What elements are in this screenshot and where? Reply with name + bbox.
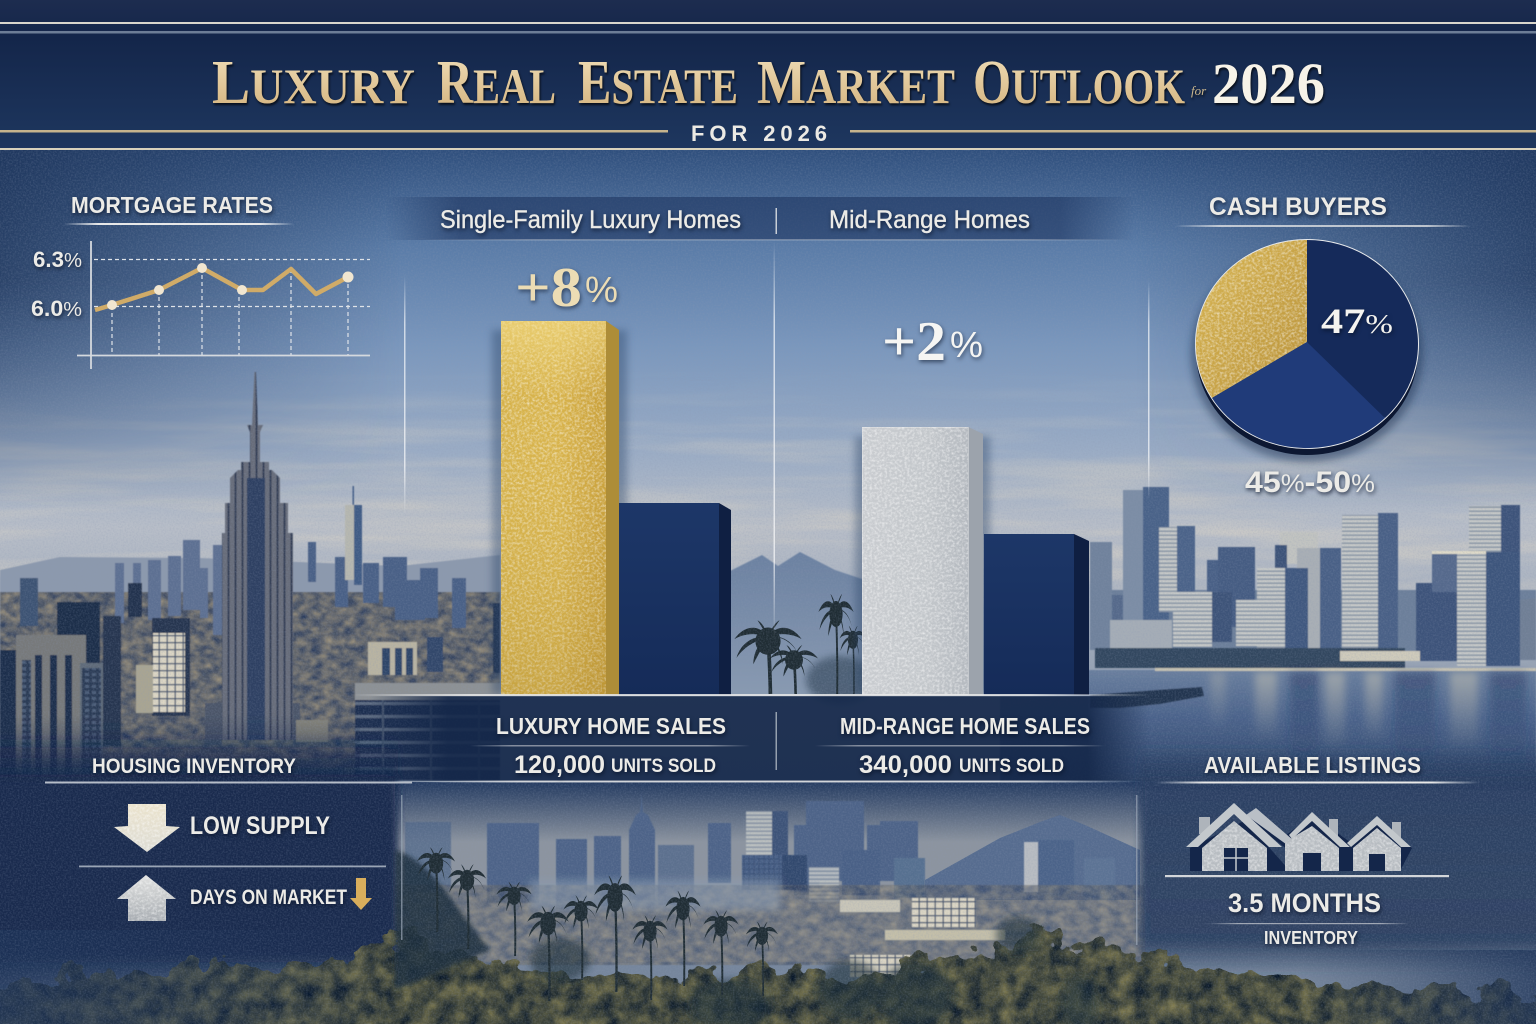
category band: Mid-Range Homes [829, 206, 1030, 234]
heading: housing inventory: HOUSING INVENTORY [92, 755, 296, 778]
title: 2026 [1212, 51, 1325, 116]
lower panels [0, 735, 398, 995]
icon: small gold down arrow [350, 878, 372, 910]
title: ESTATE [578, 49, 738, 117]
value: 340,000 units sold: 340,000 [859, 751, 952, 779]
sales band [350, 694, 1150, 945]
header band [0, 0, 1536, 150]
Empire State tower [205, 372, 328, 745]
panel: bar comparison [350, 197, 1150, 945]
panel: mortgage rates [31, 192, 370, 369]
value: +8%: +8 [515, 257, 582, 319]
subtitle: FOR 2026 [691, 121, 827, 146]
heading: cash buyers: CASH BUYERS [1209, 193, 1387, 221]
label: luxury home sales: LUXURY HOME SALES [496, 713, 726, 739]
value: +2% [882, 311, 983, 373]
value: 120,000 units sold [514, 751, 716, 779]
label: days on market: DAYS ON MARKET [190, 886, 347, 909]
title: LUXURY [212, 49, 415, 117]
water [1000, 670, 1536, 790]
title: for [1191, 83, 1207, 98]
category band: Single-Family Luxury Homes [440, 206, 741, 234]
pie chart [1191, 240, 1423, 462]
luxury bars [501, 257, 731, 695]
panel: available listings [1155, 752, 1480, 948]
value: 340,000 units sold: UNITS SOLD [959, 756, 1064, 777]
value: +2%: +2 [882, 311, 946, 373]
value: 120,000 units sold: 120,000 [514, 751, 605, 779]
title: REAL [437, 49, 556, 117]
title [212, 49, 1325, 117]
pier [1090, 687, 1204, 708]
one world tower [345, 486, 362, 585]
center mountains [700, 552, 880, 704]
icon: up arrow [117, 875, 176, 921]
panel: cash buyers [1175, 193, 1471, 499]
panel: housing inventory [45, 755, 412, 921]
mid-range bars [862, 311, 1089, 695]
title: OUTLOOK [973, 49, 1185, 117]
label: mid-range home sales: MID-RANGE HOME SALES [840, 713, 1090, 739]
label: low supply: LOW SUPPLY [190, 812, 330, 840]
value: 47%: 47 % [1321, 301, 1393, 341]
value: 340,000 units sold [859, 751, 1064, 779]
line chart [31, 241, 370, 369]
axis label 6.0%: 6.0% [31, 296, 82, 321]
value: 45%-50%: 45%-50% [1245, 466, 1375, 499]
label: inventory: INVENTORY [1264, 928, 1358, 948]
value: +8%: % [585, 269, 618, 310]
center palms [734, 594, 862, 694]
axis label 6.3%: 6.3% [33, 247, 82, 272]
heading: available listings: AVAILABLE LISTINGS [1204, 752, 1421, 778]
heading: mortgage rates: MORTGAGE RATES [71, 192, 273, 218]
right skyline [1000, 487, 1536, 790]
dark tree clusters [530, 917, 1098, 1024]
value: 3.5 months: 3.5 MONTHS [1228, 888, 1381, 918]
left skyline [0, 372, 500, 785]
lower center skyline [395, 782, 1145, 977]
value: 120,000 units sold: UNITS SOLD [611, 756, 716, 777]
icon: houses [1186, 803, 1412, 871]
value: +8% [515, 257, 618, 319]
value: +2%: % [950, 324, 983, 365]
foliage [0, 850, 1536, 1024]
title: MARKET [757, 49, 955, 117]
lower palms [417, 847, 778, 1001]
category band [385, 197, 1135, 240]
icon: down arrow [114, 804, 180, 852]
bar shadows [492, 330, 990, 694]
